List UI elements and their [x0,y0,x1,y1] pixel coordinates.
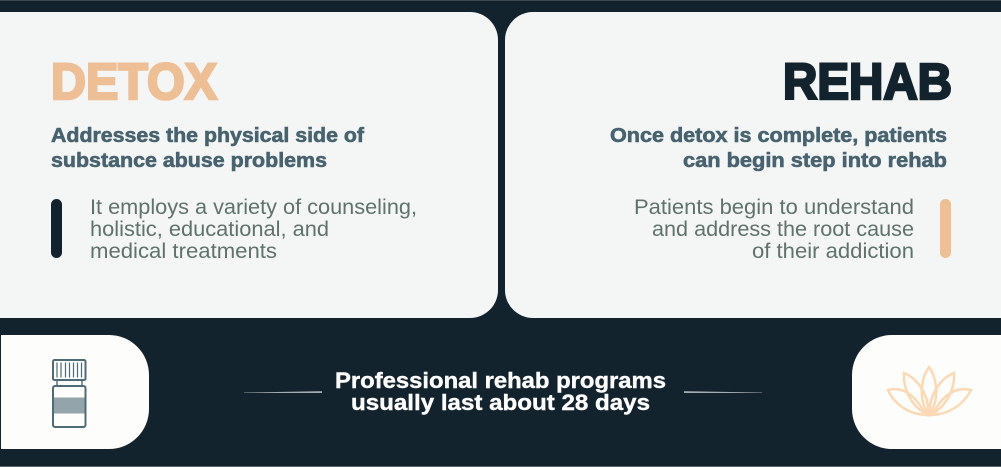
divider line: right [684,391,762,393]
subheading: rehab: can begin step into rehab [683,150,947,172]
subheading: rehab: Once detox is complete, patients [610,125,947,147]
body text: detox: medical treatments [90,240,277,263]
icon: medicine bottle [53,360,86,427]
panel: lotus icon tile [852,335,1001,449]
subheading: detox: substance abuse problems [51,150,327,172]
heading: rehab: REHAB [783,53,952,110]
panel: bottle icon tile [1,335,149,449]
subheading: detox: Addresses the physical side of [51,125,364,147]
subheading: rehab [610,125,947,172]
body text: rehab: and address the root cause [652,218,914,241]
callout text: Professional rehab programs [335,368,666,393]
body text: detox [90,196,417,263]
body text: rehab: of their addiction [752,240,914,263]
callout text [335,368,666,415]
body text: rehab: Patients begin to understand [634,196,914,219]
body text: detox: It employs a variety of counseling, [90,196,417,219]
accent bar: rehab [940,199,951,258]
callout text: usually last about 28 days [351,390,650,415]
body text: rehab [634,196,914,263]
panel: rehab [505,12,1001,318]
heading: detox: DETOX [51,53,217,110]
panel: detox [0,12,498,318]
subheading: detox [51,125,364,172]
divider line: left [244,391,322,393]
icon: lotus [888,367,971,415]
accent bar: detox [51,199,62,258]
body text: detox: holistic, educational, and [90,218,329,241]
